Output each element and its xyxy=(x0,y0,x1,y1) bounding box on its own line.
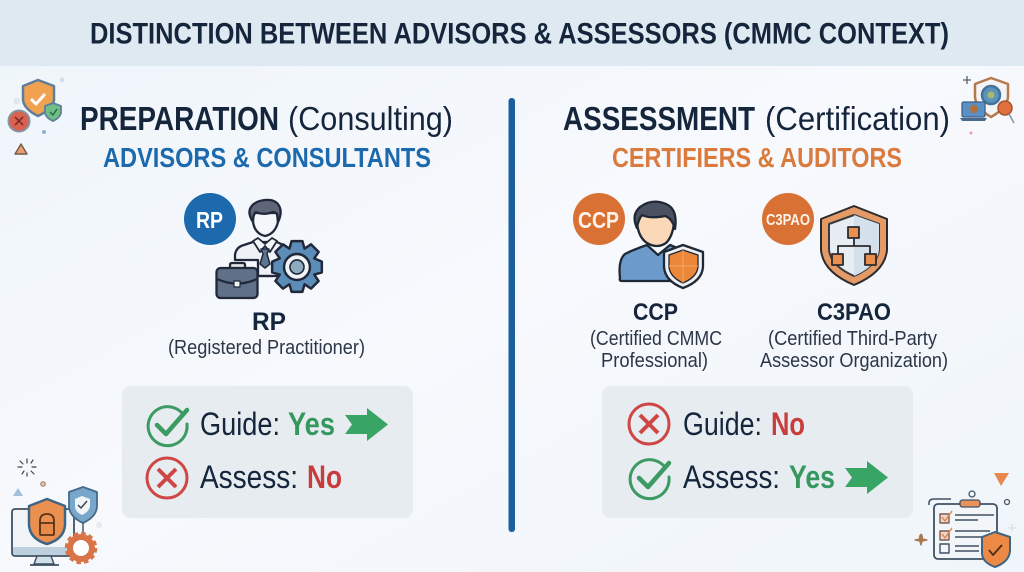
text: assess no: Assess: xyxy=(200,459,298,495)
heading: preparation xyxy=(80,101,453,138)
label: RP: RP xyxy=(252,308,286,336)
text: guide no: No xyxy=(771,406,805,442)
text: guide no: Guide: xyxy=(683,406,762,442)
arrow: green xyxy=(845,461,888,494)
icon: red cross xyxy=(147,458,187,498)
icon: shields top left xyxy=(8,78,64,154)
title banner xyxy=(0,0,1024,66)
icon: monitor, shields and gear bottom left xyxy=(12,459,102,565)
label: C3PAO: C3PAO xyxy=(817,299,891,326)
badge: CCP: CCP xyxy=(578,207,619,233)
text: guide yes: Yes xyxy=(288,406,335,442)
heading: preparation: (Consulting) xyxy=(288,101,453,138)
icon: laptop, shield and magnifier top right xyxy=(960,76,1014,134)
icon: checklist and shield bottom right xyxy=(915,473,1016,567)
label: CCP: CCP xyxy=(633,299,678,326)
badge: RP xyxy=(184,193,236,245)
icon: green check xyxy=(148,407,187,446)
heading: assessment: ASSESSMENT xyxy=(563,101,755,138)
badge: CCP xyxy=(573,193,625,245)
panel: advisor permissions xyxy=(122,386,413,518)
label: C3PAO: (Certified Third-Party xyxy=(768,328,937,350)
badge: C3PAO xyxy=(762,193,814,245)
label: CCP: Professional) xyxy=(601,350,708,372)
heading: assessment: (Certification) xyxy=(765,101,950,138)
label: RP: (Registered Practitioner) xyxy=(168,337,365,359)
text: assess yes: Yes xyxy=(789,459,835,495)
icon: green check xyxy=(630,460,669,499)
text: guide yes xyxy=(200,406,335,442)
icon: practitioner with briefcase and gear xyxy=(216,200,322,298)
label: CCP xyxy=(590,299,722,372)
text: assess yes: Assess: xyxy=(683,459,780,495)
panel: assessor permissions xyxy=(602,386,913,518)
center divider xyxy=(508,98,515,532)
heading: preparation: PREPARATION xyxy=(80,101,279,138)
icon: C3PAO shield with org chart xyxy=(821,206,887,285)
label: CCP: (Certified CMMC xyxy=(590,328,722,350)
subheading: advisors and consultants: ADVISORS & CONSULTANTS xyxy=(103,142,431,173)
label: RP xyxy=(168,308,365,359)
badge: C3PAO: C3PAO xyxy=(766,212,810,229)
label: C3PAO xyxy=(760,299,948,372)
text: assess no: No xyxy=(307,459,342,495)
text: guide yes: Guide: xyxy=(200,406,280,442)
subheading: certifiers and auditors: CERTIFIERS & AUDITORS xyxy=(612,142,902,173)
badge: RP: RP xyxy=(196,207,223,233)
icon: professional with shield xyxy=(620,202,703,288)
arrow: green xyxy=(345,408,388,441)
icon: red cross xyxy=(629,404,669,444)
heading: assessment xyxy=(563,101,950,138)
label: C3PAO: Assessor Organization) xyxy=(760,350,948,372)
